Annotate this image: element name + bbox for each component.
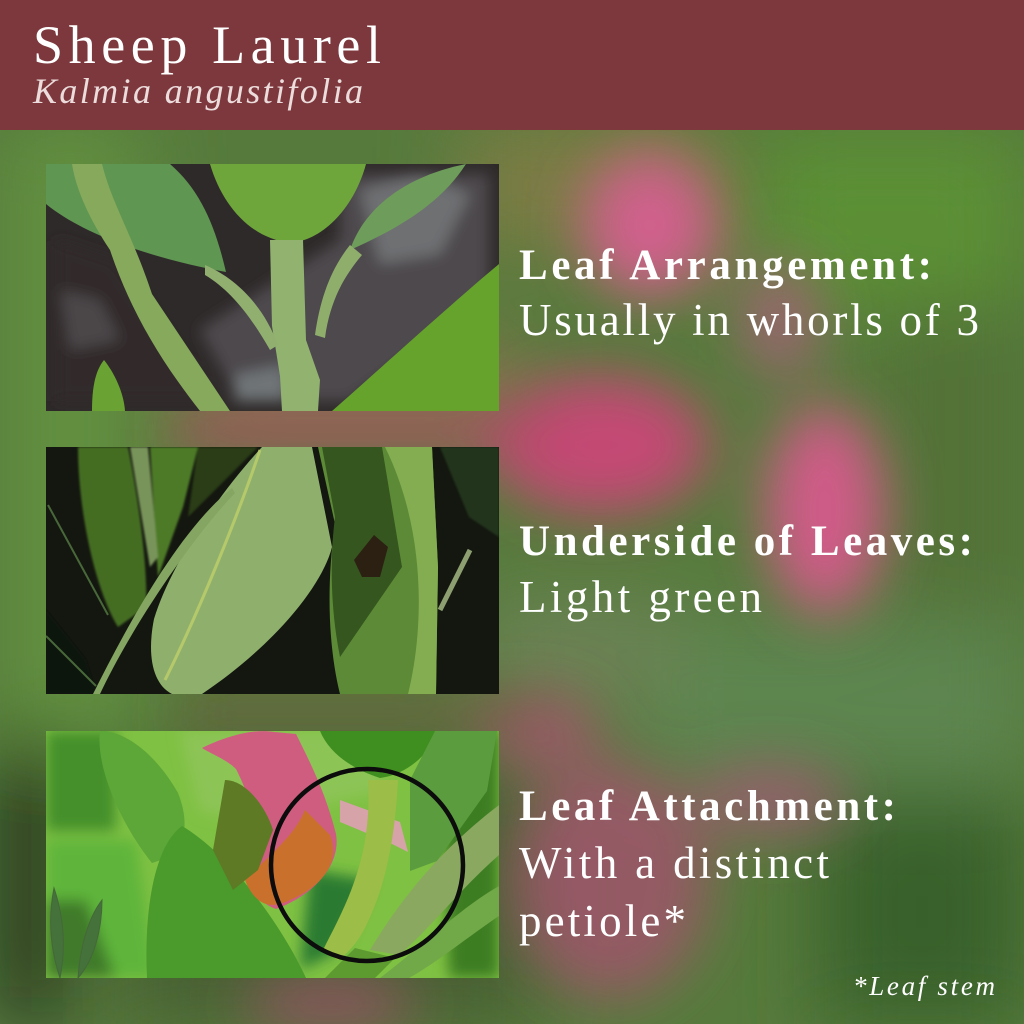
text block: leaf arrangement: [519, 242, 979, 345]
annotation circle: [271, 769, 463, 961]
text block: underside of leaves: Light green: [519, 572, 762, 622]
text block: leaf attachment: With a distinct: [519, 838, 829, 888]
text block: leaf attachment: [519, 783, 896, 946]
photo: leaf attachment with circled petiole: [46, 731, 499, 978]
subtitle: scientific name: Kalmia angustifolia: [32, 71, 363, 111]
text block: leaf arrangement: Usually in whorls of 3: [519, 295, 979, 345]
text block: underside of leaves: [519, 518, 973, 622]
text block: leaf arrangement: Leaf Arrangement:: [519, 242, 932, 289]
text block: leaf attachment: petiole*: [519, 896, 686, 946]
photo: underside of leaves: [46, 447, 499, 694]
footnote: *Leaf stem: [853, 971, 995, 1001]
title: Sheep Laurel: [33, 15, 381, 75]
text block: leaf attachment: Leaf Attachment:: [519, 783, 896, 830]
photo: leaf arrangement: [46, 164, 499, 411]
text block: underside of leaves: Underside of Leaves:: [519, 518, 973, 565]
header band: [0, 0, 1024, 130]
